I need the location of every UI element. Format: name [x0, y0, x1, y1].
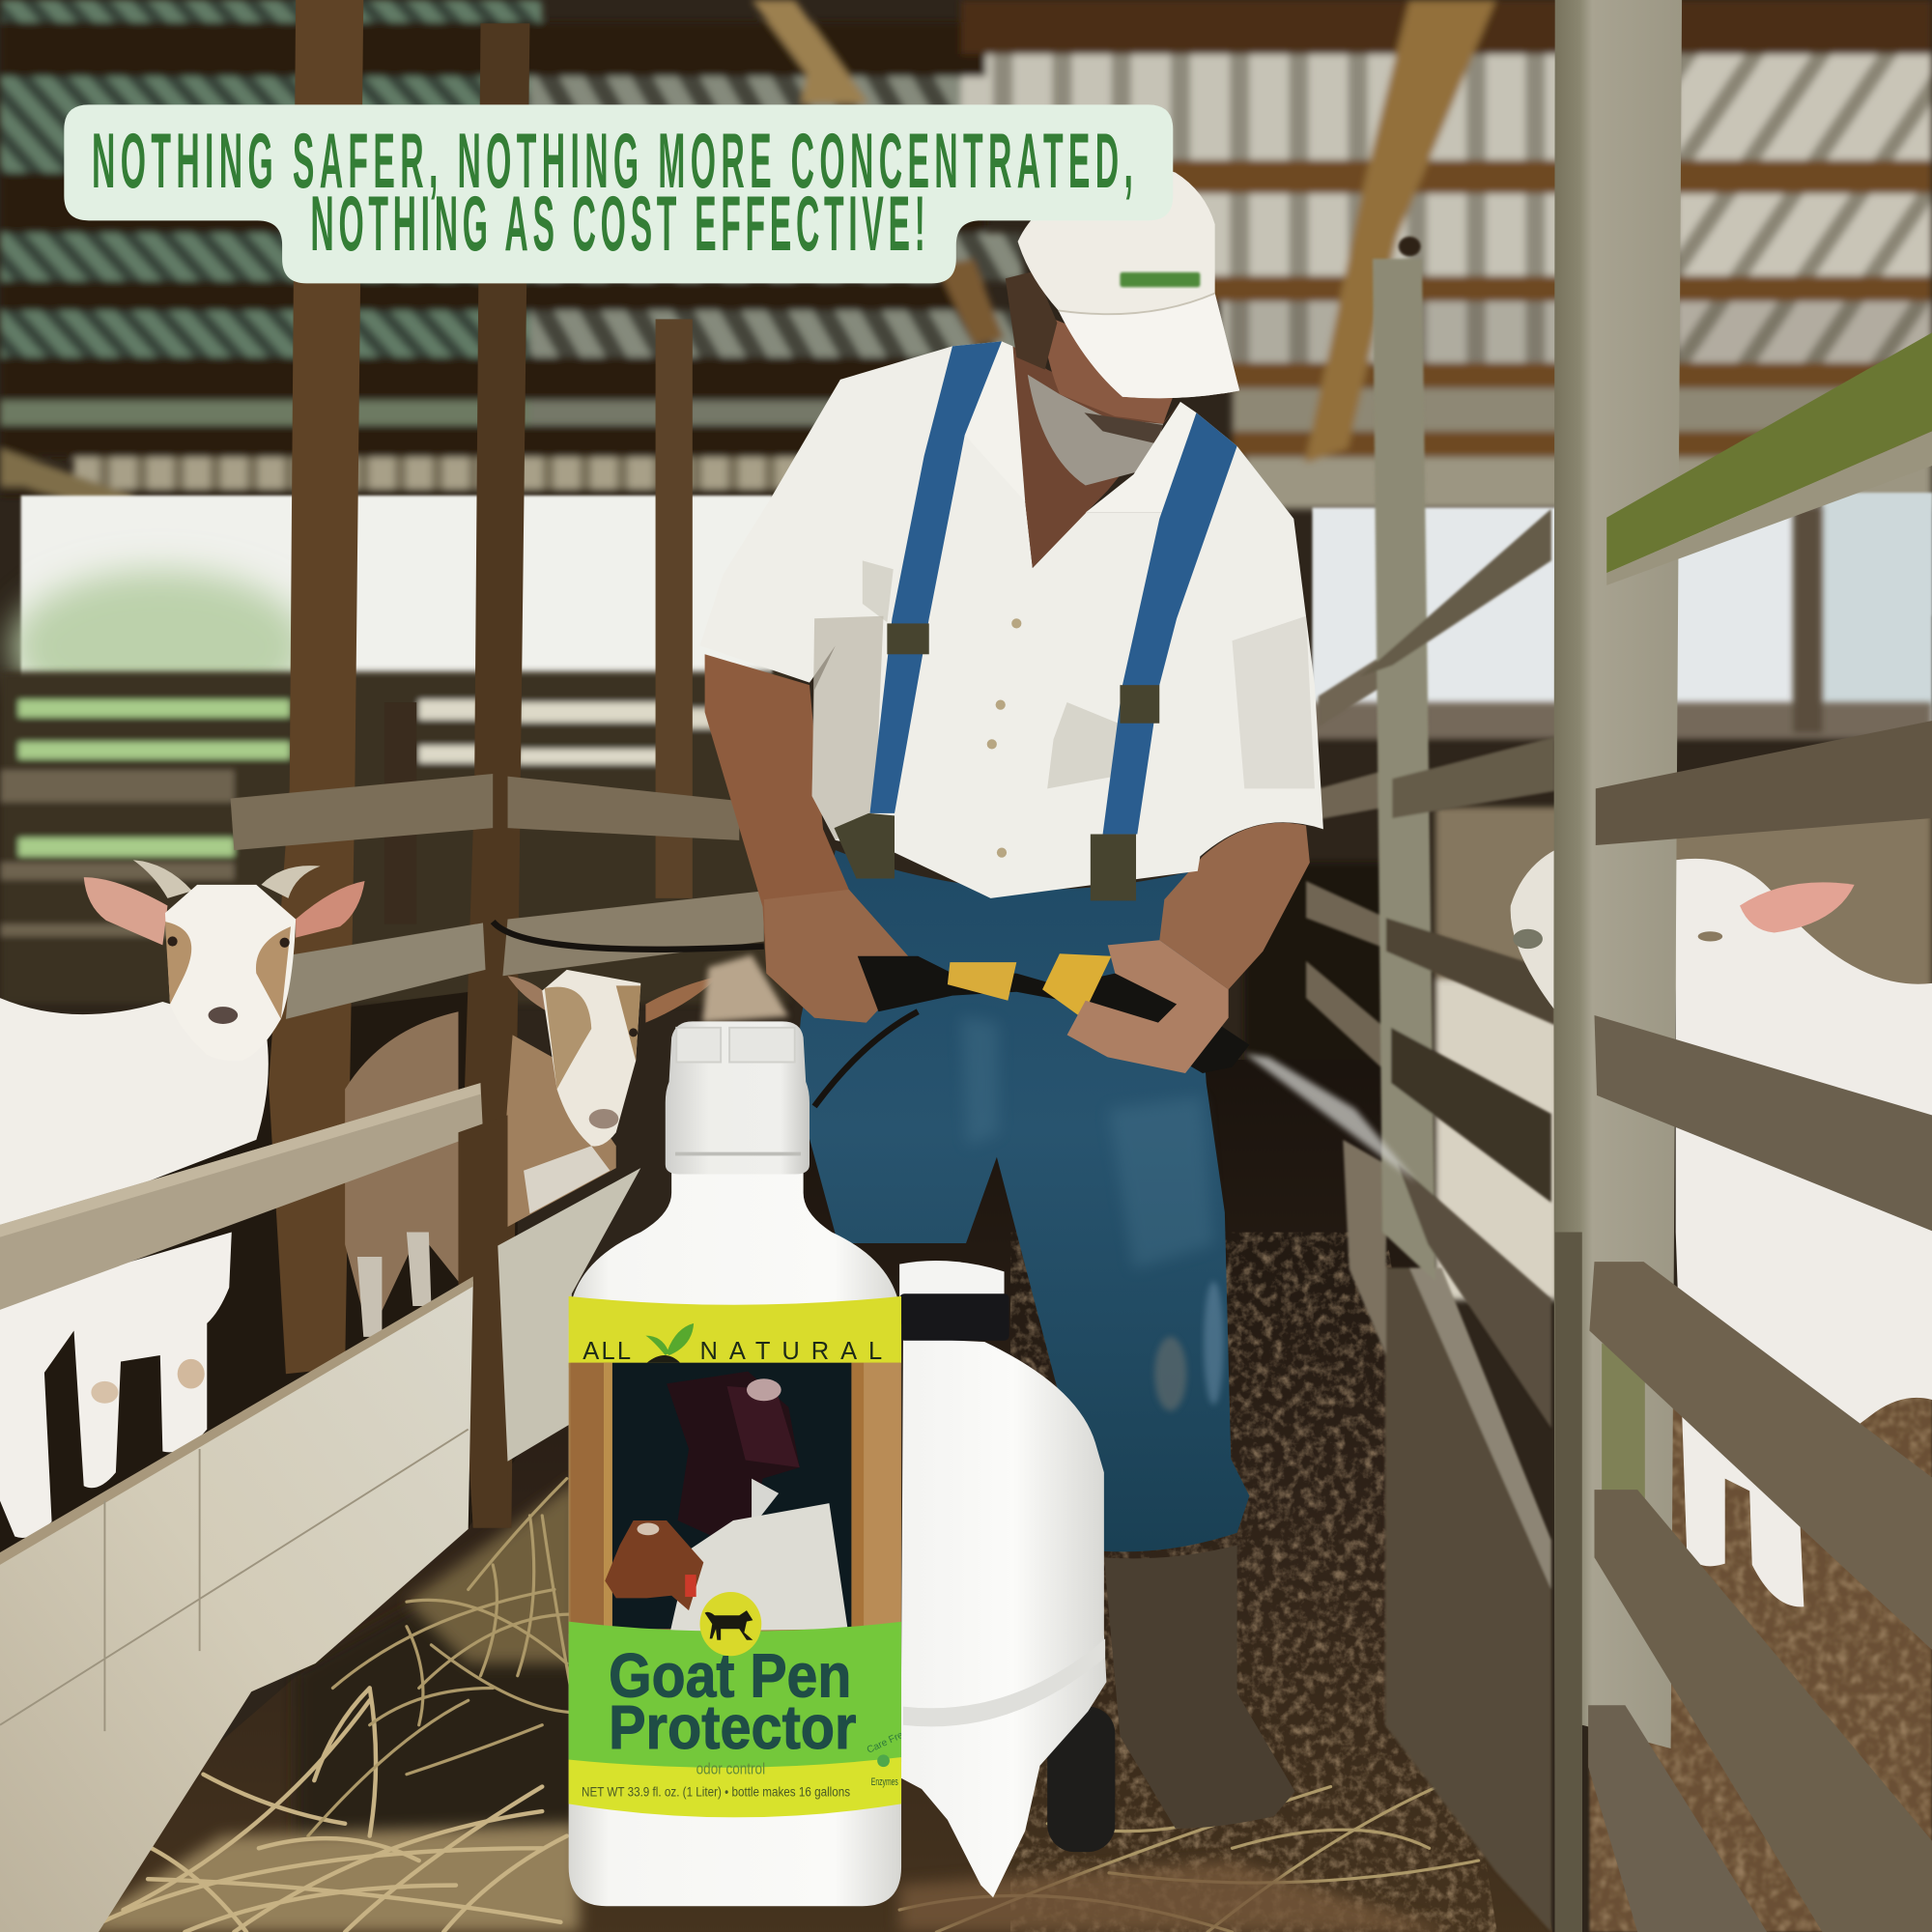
inner post	[1373, 259, 1435, 1282]
face	[1511, 838, 1589, 1010]
diagonal rafter	[1305, 0, 1495, 464]
lower yellow band	[568, 1757, 902, 1818]
care free logo: Enzymes	[871, 1776, 898, 1788]
ear	[1740, 882, 1855, 933]
left arm skin	[705, 654, 918, 1023]
boot	[1104, 1545, 1295, 1829]
wall panel near	[0, 1282, 473, 1932]
collar left	[965, 341, 1025, 501]
green band	[568, 1622, 903, 1768]
right fence	[1306, 237, 1932, 1932]
hat logo	[1120, 272, 1200, 287]
cap	[666, 1021, 810, 1175]
head	[542, 970, 640, 1147]
sprayer tank	[899, 1261, 1115, 1897]
shirt shading	[812, 560, 1315, 840]
chest patch	[752, 1478, 779, 1518]
jeans	[795, 850, 1249, 1551]
callout bubble	[64, 104, 1173, 283]
wand	[858, 956, 1249, 1073]
bottle body	[569, 1158, 901, 1906]
all natural text: ALL	[582, 1338, 631, 1365]
tan body right of post	[497, 1035, 616, 1233]
brown kid	[605, 1520, 703, 1610]
suspenders	[870, 341, 1237, 835]
care free logo	[866, 1727, 910, 1788]
post overlap	[458, 1115, 508, 1528]
headline line 1: NOTHING SAFER, NOTHING MORE CONCENTRATED,	[92, 118, 1133, 205]
left fence front	[0, 1083, 640, 1932]
barn roof	[0, 0, 1932, 520]
lid ring	[899, 1293, 1009, 1341]
yellow band	[568, 1293, 903, 1368]
care free logo: Care Free	[866, 1727, 910, 1756]
goat silhouette	[705, 1610, 753, 1640]
big fence post and rails	[1553, 0, 1932, 1932]
farmer	[699, 168, 1323, 1829]
product name: Goat Pen	[609, 1640, 851, 1710]
far rails	[1306, 653, 1386, 1072]
tank body	[900, 1338, 1106, 1897]
fence posts	[269, 0, 693, 1528]
hose and spray wand	[493, 922, 1417, 1182]
dark goat	[667, 1372, 800, 1539]
wall panel far	[497, 1168, 640, 1462]
shirt buttons	[987, 618, 1021, 858]
goat left	[0, 860, 365, 1538]
hose	[493, 922, 764, 950]
right background	[1244, 505, 1932, 1300]
upper rails	[231, 774, 764, 1019]
shirt	[699, 341, 1323, 898]
collar right	[1086, 402, 1197, 513]
left fence back	[231, 0, 764, 1528]
rails	[1588, 332, 1932, 1932]
stall wall bottom	[1385, 1267, 1551, 1932]
sky seen through the barn	[13, 493, 1932, 724]
product bottle	[568, 1021, 910, 1906]
body	[0, 998, 269, 1238]
white legs	[357, 1233, 431, 1337]
white goat	[670, 1503, 848, 1632]
dark pen interior	[0, 985, 518, 1577]
headline callout	[64, 104, 1173, 283]
roof beams right	[961, 0, 1932, 457]
right arm skin	[1159, 823, 1310, 989]
goat right	[1511, 838, 1932, 1606]
bracket	[0, 448, 131, 520]
roof left	[0, 0, 1060, 489]
goat middle	[345, 955, 788, 1337]
head	[165, 885, 296, 1061]
label	[568, 1293, 910, 1836]
neck skin	[1012, 346, 1180, 568]
main post	[1553, 0, 1682, 1932]
tank lid	[899, 1261, 1005, 1300]
floor texture	[1010, 1233, 1497, 1932]
hat	[1018, 168, 1239, 398]
goat medallion	[699, 1592, 761, 1656]
odor control: odor control	[696, 1760, 765, 1778]
ears	[508, 976, 557, 1016]
label: Protector	[609, 1692, 856, 1762]
beard	[1028, 375, 1163, 486]
leaf logo	[645, 1323, 694, 1363]
tan body left of post	[345, 1011, 458, 1337]
label: NATURAL	[699, 1338, 882, 1365]
suspender buckles	[835, 623, 1159, 900]
horns	[133, 860, 192, 898]
hair	[1006, 271, 1057, 370]
dark straw gap	[296, 1516, 579, 1848]
headline line 2: NOTHING AS COST EFFECTIVE!	[310, 181, 925, 268]
goat behind	[702, 955, 788, 1023]
wheel	[1047, 1707, 1115, 1852]
net weight: NET WT 33.9 fl. oz. (1 Liter) • bottle makes 16 gallons	[582, 1785, 850, 1800]
floor dirt	[0, 1060, 1552, 1932]
spray mist	[1244, 1054, 1417, 1182]
upper brace	[752, 0, 868, 103]
front rail	[0, 1083, 483, 1310]
roof right	[961, 54, 1932, 509]
back fence, left	[0, 671, 788, 1005]
mustache	[1084, 412, 1163, 443]
right stall straw	[1589, 1392, 1932, 1932]
face	[1041, 314, 1182, 424]
right hand	[1067, 940, 1229, 1073]
ears	[84, 877, 167, 945]
left hand	[764, 890, 918, 1023]
body	[1676, 859, 1932, 1606]
roof beams left	[0, 22, 985, 496]
straw on the floor	[74, 1479, 1479, 1932]
inner rails	[1360, 509, 1555, 1428]
label photo	[568, 1363, 903, 1634]
